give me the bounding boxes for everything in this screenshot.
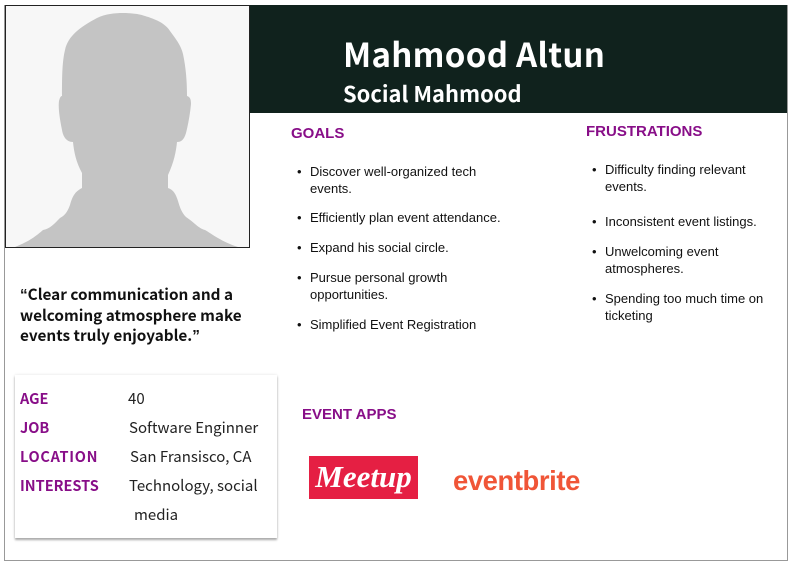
frustration 3 (605, 243, 718, 277)
frustration 4: Spending too much time on (605, 291, 763, 306)
frustration 4 (605, 290, 763, 324)
frustration 2: Inconsistent event listings. (605, 214, 757, 229)
quote (20, 283, 242, 346)
age label: AGE (20, 388, 48, 409)
interests value continued: media (134, 504, 178, 525)
logo: meetup (309, 456, 418, 499)
portrait placeholder (5, 5, 250, 248)
goal 3: Expand his social circle. (310, 240, 449, 255)
job label: JOB (20, 417, 49, 438)
panel: demographics (15, 375, 277, 538)
meetup wordmark: Meetup (315, 459, 412, 494)
goal 4: Pursue personal growth (310, 270, 447, 285)
header banner (249, 5, 787, 113)
goal 5: Simplified Event Registration (310, 317, 476, 332)
event apps heading: EVENT APPS (302, 406, 396, 423)
frustration 3: atmospheres. (605, 261, 684, 276)
goal 1: events. (310, 181, 352, 196)
quote: events truly enjoyable.” (20, 324, 200, 346)
goal 2: Efficiently plan event attendance. (310, 210, 501, 225)
interests value: Technology, social (129, 475, 258, 496)
nickname: Social Mahmood (343, 78, 522, 109)
frustration 4: ticketing (605, 308, 653, 323)
goal 4: opportunities. (310, 287, 388, 302)
goals list (298, 164, 501, 332)
frustration 1: Difficulty finding relevant (605, 162, 746, 177)
frustration 1: events. (605, 179, 647, 194)
location label: LOCATION (20, 446, 98, 467)
frustration 1 (605, 161, 746, 195)
frustration 3: Unwelcoming event (605, 244, 718, 259)
frustrations list (592, 162, 763, 323)
quote: “Clear communication and a (20, 283, 233, 305)
name: Mahmood Altun (343, 29, 605, 77)
goals heading: GOALS (291, 125, 344, 142)
goal 4 (310, 269, 447, 303)
goal 1 (310, 163, 476, 197)
age value: 40 (128, 388, 145, 409)
job value: Software Enginner (129, 417, 258, 438)
goal 1: Discover well-organized tech (310, 164, 476, 179)
quote: welcoming atmosphere make (20, 304, 242, 326)
interests label: INTERESTS (20, 475, 99, 496)
location value: San Fransisco, CA (130, 446, 251, 467)
frustrations heading: FRUSTRATIONS (586, 123, 702, 140)
logo: eventbrite: eventbrite (453, 465, 580, 496)
